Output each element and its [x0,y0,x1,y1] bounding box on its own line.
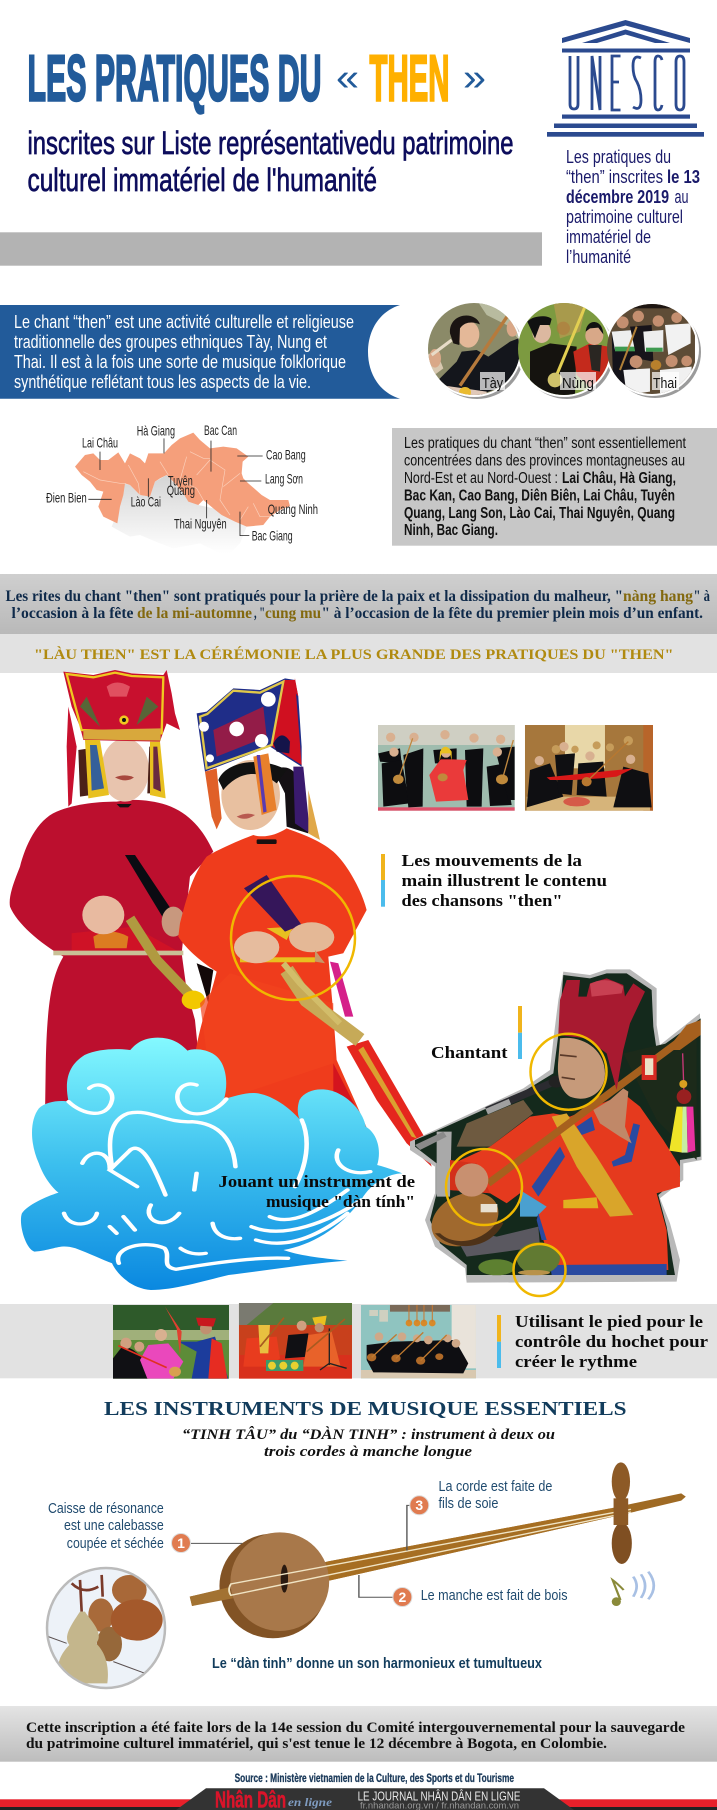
circle: hands highlight [231,876,355,1000]
label: Jouant un instrument: musique "dàn tính" [266,1192,415,1211]
panel: intro banner: synthétique reflétant tous les aspects de la vie. [14,372,311,392]
label: part 2 [393,1587,568,1606]
text block: inscription date: Les pratiques du [566,147,671,167]
panel: rites: " à [694,588,710,605]
map: northern provinces: Lang Sơn [265,470,303,486]
map: northern provinces: Lai Châu [82,435,118,451]
subheading: tinh tau: “TINH TÂU” du “DÀN TINH” : instrument à deux ou [182,1426,555,1443]
panel: intro banner: Le chant “then” est une activité culturelle et religieuse [14,312,354,332]
title: « [336,57,359,99]
heading: Lau Then: "LÀU THEN" EST LA CÉRÉMONIE LA PLUS GRANDE DES PRATIQUES DU "THEN" [34,646,674,663]
label: part 1 [48,1500,190,1552]
footer: en ligne [288,1795,333,1809]
panel: intro banner: Thai. Il est à la fois une sorte de musique folklorique [14,352,346,372]
callout: hand movements [381,851,607,910]
label: part 3: 3 [415,1497,423,1513]
title: LES PRATIQUES DU [28,42,322,114]
caption: dan tinh sound: Le “dàn tinh” donne un son harmonieux et tumultueux [212,1655,543,1672]
heading: Lau Then [0,634,717,673]
label: part 3 [410,1478,552,1515]
label: part 2: Le manche est fait de bois [421,1587,568,1604]
panel: inscription note: Cette inscription a été faite lors de la 14e session du Comité intergouvernemental pour la sauvegarde [26,1720,685,1736]
subheading: tinh tau: trois cordes à manche longue [264,1444,472,1460]
panel: intro banner [0,305,400,399]
callout: hand movements: Les mouvements de la [402,851,583,870]
map: northern provinces: Quang Ninh [268,501,318,517]
map: northern provinces: Tuyên [168,472,193,488]
photo: group on stage [378,725,515,811]
subtitle: culturel immatériel de l'humanité [28,162,377,198]
labels: group names: Thai [653,375,677,392]
panel: rites: de la mi-automne [137,605,252,622]
panel: inscription note: du patrimoine culturel immatériel, qui s'est tenue le 12 décembre à Bogota, en Colombie. [26,1736,607,1752]
source line: Source : Ministère vietnamien de la Culture, des Sports et du Tourisme [235,1771,514,1785]
labels: group names [480,372,679,392]
footer [0,1786,717,1810]
label: Jouant un instrument [218,1172,415,1211]
map: northern provinces [46,422,318,553]
panel: provinces: Nord-Est et au Nord-Ouest : [404,470,558,487]
map: northern provinces: Bac Can [204,422,237,438]
subheading: tinh tau [182,1426,555,1460]
gray band [0,232,542,266]
panel: photos and foot rhythm: créer le rythme [515,1352,637,1371]
map: northern provinces: Hà Giang [137,422,175,438]
photo: stage trio [239,1303,352,1379]
circles: singing, playing and foot highlights [446,1034,606,1296]
figure: male performer [10,670,213,1117]
callout: hand movements: main illustrent le contenu [402,871,607,890]
panel: photos and foot rhythm [0,1303,717,1379]
footer: LE JOURNAL NHÂN DÂN EN LIGNE [358,1789,520,1804]
label: part 2: 2 [399,1589,407,1605]
illustration: dan tinh instrument [190,1462,686,1638]
panel: rites [0,574,717,634]
map: northern provinces: Thai Nguyên [174,515,227,531]
title: » [463,57,486,99]
figure: female performer [178,678,432,1170]
photo: outdoor performers [113,1305,229,1379]
label: Jouant un instrument: Jouant un instrument de [218,1172,415,1191]
text block: inscription date: l’humanité [566,247,631,267]
labels: group names: Tày [482,375,503,392]
label: part 3: fils de soie [438,1495,498,1512]
label: part 1: est une calebasse [64,1517,164,1534]
photo: calabash gourds [47,1568,165,1688]
photo: Nùng [518,303,608,395]
panel: provinces [392,428,717,546]
callout: hand movements: des chansons "then" [402,891,562,910]
illustration: cloud and wave [21,1038,402,1290]
text block: inscription date [566,147,700,267]
panel: rites: Les rites du chant "then" sont pratiqués pour la prière de la paix et la dissipation du malheur, " [6,588,623,605]
subtitle: inscrites sur Liste représentativedu patrimoine [28,125,514,161]
label: part 1: coupée et séchée [67,1535,164,1552]
figure: musician playing dan tinh [410,969,702,1283]
panel: intro banner: traditionnelle des groupes ethniques Tày, Nung et [14,332,327,352]
panel: rites: " à l’occasion de la fête du premier plein mois d’un enfant. [322,605,703,622]
icon: UNESCO temple logo [547,20,704,137]
text block: inscription date: décembre 2019 [566,187,669,207]
panel: rites: cung mu [265,605,321,622]
label: Chantant: Chantant [431,1043,508,1062]
labels: group names: Nùng [562,375,594,392]
heading: instruments: LES INSTRUMENTS DE MUSIQUE ESSENTIELS [104,1398,626,1420]
photos: ethnic groups [425,300,701,402]
text block: inscription date: immatériel de [566,227,651,247]
panel: photos and foot rhythm: contrôle du hochet pour [515,1332,709,1351]
photo: group in house [525,725,653,811]
label: part 3: La corde est faite de [438,1478,552,1495]
text block: inscription date: patrimoine culturel [566,207,683,227]
panel: inscription note [0,1706,717,1762]
map: northern provinces: Đien Bien [46,490,87,506]
label: part 1: Caisse de résonance [48,1500,164,1517]
label: Chantant [431,1006,522,1062]
panel: rites: , " [254,605,265,622]
map: northern provinces: Quang [167,482,195,498]
panel: rites: l’occasion à la fête [12,605,134,622]
map: northern provinces: Bac Giang [252,528,293,544]
map: northern provinces: Lào Cai [131,494,161,510]
map: northern provinces: Cao Bang [266,446,306,462]
subtitle [28,125,514,198]
panel: provinces: Ninh, Bac Giang. [404,522,498,539]
title: THEN [370,42,450,114]
panel: rites: nàng hang [623,588,693,605]
panel: photos and foot rhythm: Utilisant le pied pour le [515,1312,704,1331]
panel: provinces: Lai Châu, Hà Giang, [562,470,676,487]
text block: inscription date: au [674,187,688,207]
text block: inscription date: le 13 [667,167,700,187]
text block: inscription date: “then” inscrites [566,167,663,187]
icon: music note and sound waves [612,1572,654,1606]
photo: indoor group [361,1305,476,1378]
photo: Thai [607,304,695,394]
label: part 1: 1 [177,1535,185,1551]
photo: Tày [428,303,519,395]
